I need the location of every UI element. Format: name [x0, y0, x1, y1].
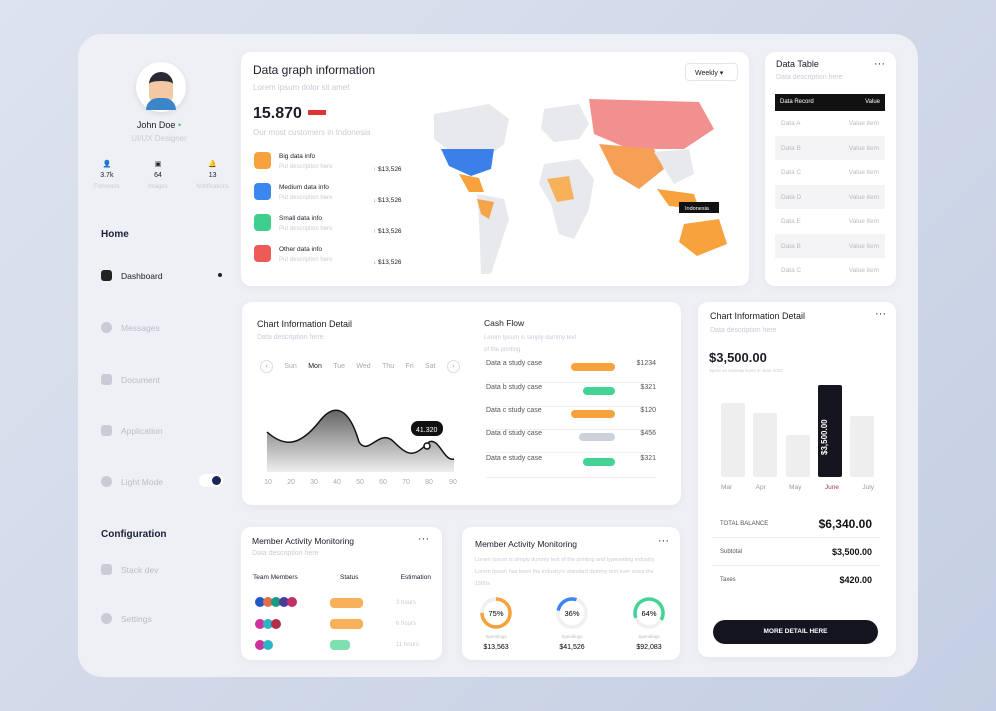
- panel: chart information + cash flow: $1234: [637, 360, 656, 367]
- stats: 👤: [102, 161, 111, 168]
- panel: data table: Data B: [781, 144, 801, 152]
- panel: member activity 1: Team Members: [253, 574, 298, 581]
- panel: map: [241, 52, 749, 286]
- panel: map: Lorem ipsum dolor sit amet: [253, 83, 349, 92]
- panel: bar chart: $3,500.00: [820, 419, 829, 455]
- stats: 13: [209, 172, 217, 179]
- panel: map: ↓ $13,526: [373, 259, 402, 266]
- panel: map: ↑ $13,526: [373, 228, 402, 235]
- panel: bar chart: Data description here: [710, 327, 777, 334]
- panel: bar chart: [698, 302, 896, 657]
- panel: member activity 2: Spendings: [485, 634, 507, 639]
- area chart: 70: [402, 479, 410, 486]
- panel: data table: ···: [874, 58, 885, 70]
- list items: Put description here: [279, 195, 332, 201]
- area chart: 30: [310, 479, 318, 486]
- sidebar: [94, 62, 229, 190]
- panel: member activity 2: 36%: [564, 609, 580, 618]
- panel: data table: Value item: [849, 194, 879, 200]
- panel: chart information + cash flow: $456: [640, 430, 656, 437]
- stats: Followers: [94, 184, 120, 190]
- panel: member activity 1: Estimation: [401, 574, 431, 581]
- panel: data table: Value: [865, 99, 880, 105]
- panel: map: ↓ $13,526: [373, 197, 402, 204]
- balance box: $420.00: [839, 575, 872, 585]
- panel: bar chart: June: [825, 484, 839, 491]
- area chart: 41.320: [416, 427, 438, 434]
- day selector: Wed: [356, 363, 371, 370]
- list items: Small data info: [279, 215, 322, 222]
- sidebar: UI/UX Designer: [131, 134, 187, 143]
- panel: bar chart: Chart Information Detail: [710, 311, 805, 321]
- panel: chart information + cash flow: $321: [640, 384, 656, 391]
- panel: chart information + cash flow: Chart Information Detail: [257, 319, 352, 329]
- world map: [434, 99, 727, 274]
- panel: data table: Data E: [781, 218, 801, 225]
- panel: bar chart: Spent on entertainment in June 2023: [709, 368, 783, 373]
- balance box: Subtotal: [720, 548, 742, 554]
- panel: chart information + cash flow: $321: [640, 455, 656, 462]
- panel: map: Data graph information: [253, 63, 375, 77]
- nav: light mode: [101, 476, 163, 487]
- day selector: Sat: [425, 363, 436, 370]
- weekly dropdown: Weekly ▾: [695, 70, 723, 77]
- day selector: Mon: [308, 363, 322, 370]
- panel: map: Our most customers in Indonesia: [253, 128, 370, 137]
- panel: member activity 1: 11 hours: [396, 642, 419, 648]
- panel: member activity 1: Member Activity Monitoring: [252, 536, 354, 546]
- panel: bar chart: Mar: [721, 484, 732, 491]
- balance box: $6,340.00: [819, 516, 872, 530]
- toggle: [199, 474, 223, 487]
- area chart: 10: [264, 479, 272, 486]
- stats: Images: [148, 184, 168, 190]
- panel: chart information + cash flow: $120: [640, 407, 656, 414]
- day selector: ‹: [265, 363, 268, 370]
- panel: chart information + cash flow: Data b study case: [486, 384, 542, 391]
- panel: data table: Value item: [849, 218, 879, 225]
- panel: data table: Value item: [849, 267, 879, 274]
- panel: data table: Data D: [781, 194, 801, 200]
- panel: member activity 1: 6 hours: [396, 621, 416, 627]
- nav: dashboard: [101, 270, 163, 281]
- panel: member activity 1: Status: [340, 574, 358, 581]
- panel: member activity 1: 3 hours: [396, 600, 416, 606]
- panel: chart information + cash flow: Data c study case: [486, 407, 542, 414]
- panel: member activity 2: $92,083: [636, 644, 662, 651]
- nav: light mode: Light Mode: [121, 476, 163, 486]
- nav: stack dev: Stack dev: [121, 564, 158, 574]
- area chart: 90: [449, 479, 457, 486]
- panel: chart information + cash flow: Data description here: [257, 334, 324, 341]
- panel: data table: Data Record: [780, 99, 814, 105]
- nav: messages: Messages: [121, 322, 160, 332]
- list items: Other data info: [279, 246, 322, 253]
- panel: member activity 2: Spendings: [561, 634, 583, 639]
- button: [713, 620, 878, 644]
- area chart: 40: [333, 479, 341, 486]
- panel: member activity 1: Data description here: [252, 550, 319, 557]
- nav: document: Document: [121, 374, 160, 384]
- heading: Home: Home: [101, 229, 129, 240]
- panel: data table: [765, 52, 896, 286]
- panel: member activity 2: Lorem Ipsum is simply dummy text of the printing and typesetting industry. Lorem Ipsum has been the industry's standard dummy text ever since the 1500s: [475, 557, 655, 587]
- panel: data table: Data C: [781, 267, 801, 274]
- balance box: $3,500.00: [832, 546, 872, 556]
- balance box: [712, 516, 880, 585]
- list items: Put description here: [279, 226, 332, 232]
- panel: chart information + cash flow: Cash Flow: [484, 318, 524, 328]
- list items: Medium data info: [279, 184, 329, 191]
- panel: bar chart: ···: [875, 308, 886, 320]
- panel: chart information + cash flow: Data a study case: [486, 360, 542, 367]
- bars: [721, 403, 745, 477]
- stats: ▣: [155, 161, 161, 168]
- day selector: Fri: [406, 363, 414, 370]
- panel: bar chart: $3,500.00: [709, 350, 767, 365]
- day selector: ›: [452, 363, 455, 370]
- name: John Doe •: [137, 120, 181, 130]
- area chart: 50: [356, 479, 364, 486]
- panel: chart information + cash flow: [242, 302, 681, 505]
- stats: [94, 160, 229, 190]
- panel: chart information + cash flow: Data e study case: [486, 455, 542, 462]
- panel: member activity 1: ···: [418, 533, 429, 545]
- panel: data table: Value item: [849, 144, 879, 152]
- panel: data table: Data C: [781, 169, 801, 176]
- weekly dropdown: [685, 63, 738, 81]
- day selector: Tue: [333, 363, 345, 370]
- list items: [254, 152, 332, 263]
- world map: Indonesia: [685, 206, 710, 212]
- area chart: 20: [287, 479, 295, 486]
- nav: settings: [101, 613, 152, 624]
- panel: data table: Value item: [849, 120, 879, 127]
- panel: chart information + cash flow: Lorem Ipsum is simply dummy text: [484, 335, 576, 341]
- panel: member activity 2: 64%: [641, 609, 657, 618]
- stats: 3.7k: [100, 172, 113, 179]
- nav: settings: Settings: [121, 614, 152, 624]
- panel: chart information + cash flow: of the printing.: [484, 347, 522, 353]
- day selector: Thu: [382, 363, 394, 370]
- panel: data table: Data B: [781, 242, 801, 250]
- day selector: [260, 360, 460, 373]
- main panel: [78, 34, 918, 677]
- panel: member activity 2: Member Activity Monitoring: [475, 539, 577, 549]
- panel: data table: Data Table: [776, 59, 819, 69]
- nav: application: [101, 425, 163, 436]
- panel: bar chart: May: [789, 484, 801, 491]
- list items: Put description here: [279, 257, 332, 263]
- panel: member activity 2: $13,563: [483, 644, 509, 651]
- panel: map: 15.870: [253, 105, 302, 122]
- nav: application: Application: [121, 426, 163, 436]
- panel: bar chart: July: [862, 484, 874, 491]
- panel: member activity 2: 75%: [488, 609, 504, 618]
- panel: data table: Value item: [849, 169, 879, 176]
- nav: document: [101, 374, 160, 385]
- day selector: Sun: [284, 363, 297, 370]
- balance box: TOTAL BALANCE: [720, 520, 768, 526]
- stats: 64: [154, 172, 162, 179]
- button: MORE DETAIL HERE: [763, 628, 828, 635]
- area chart: 60: [379, 479, 387, 486]
- list items: Put description here: [279, 164, 332, 170]
- panel: member activity 2: Spendings: [638, 634, 660, 639]
- nav: dashboard: Dashboard: [121, 270, 163, 280]
- panel: bar chart: Apr: [756, 484, 766, 491]
- panel: data table: Value item: [849, 242, 879, 250]
- nav: messages: [101, 322, 160, 333]
- stats: Notifications: [196, 184, 229, 190]
- panel: data table: Data A: [781, 120, 801, 127]
- panel: data table: Data description here: [776, 74, 843, 81]
- balance box: Taxes: [720, 577, 736, 583]
- heading: configuration: Configuration: [101, 529, 167, 540]
- stats: 🔔: [208, 161, 217, 168]
- list items: Big data info: [279, 153, 315, 160]
- area chart: [264, 410, 457, 486]
- panel: member activity 2: [462, 527, 680, 660]
- panel: member activity 2: ···: [658, 535, 669, 547]
- area chart: 80: [425, 479, 433, 486]
- panel: map: ↑ $13,526: [373, 166, 402, 173]
- panel: member activity 1: [241, 527, 442, 660]
- panel: chart information + cash flow: Data d study case: [486, 430, 542, 437]
- nav: stack dev: [101, 564, 158, 575]
- avatar: [136, 62, 186, 112]
- panel: member activity 2: $41,526: [559, 644, 585, 651]
